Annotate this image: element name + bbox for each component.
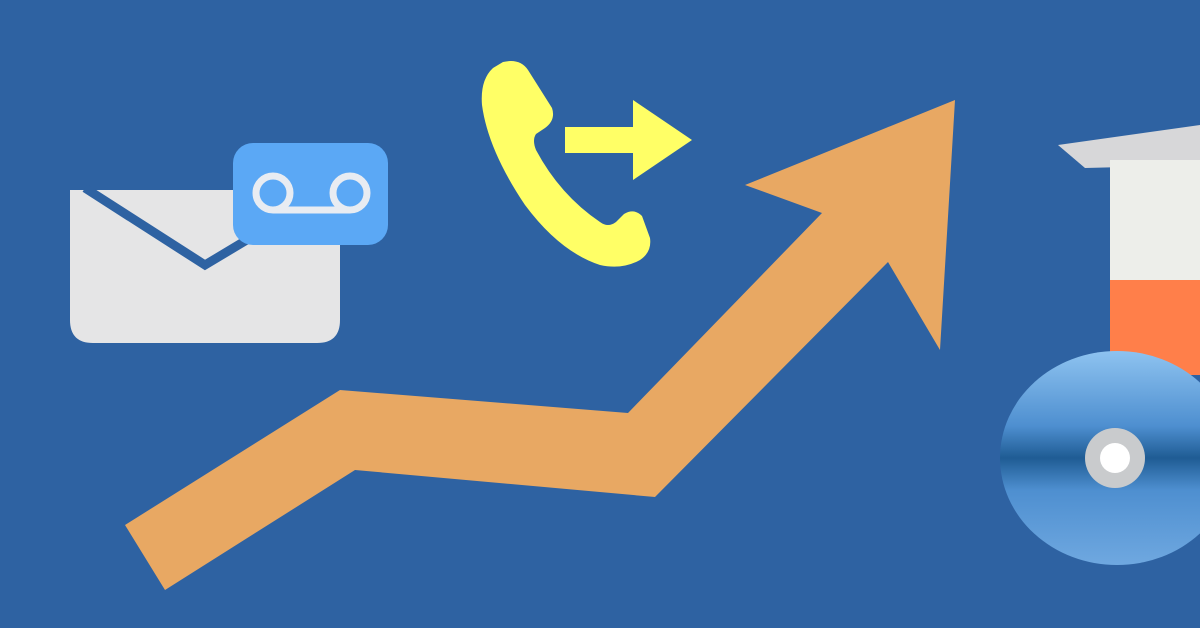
icon: phone with outgoing arrow [482,61,692,267]
icon: box [1058,125,1200,375]
icon: envelope [70,188,340,343]
arrow: growth trend [125,100,955,590]
icon: voicemail badge [233,143,388,245]
icon: disc [1000,351,1200,565]
